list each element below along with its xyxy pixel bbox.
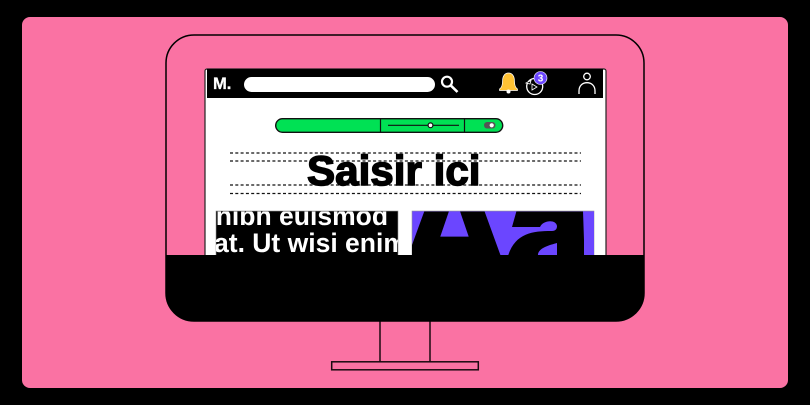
logo: M. (213, 75, 231, 93)
type specimen card: A (395, 136, 514, 320)
type specimen card (412, 210, 594, 255)
text specimen card: at. Ut wisi enim (214, 228, 407, 258)
text specimen card: nibh euismod (216, 201, 388, 231)
icon: magnifier (442, 77, 458, 92)
slider toolbar (276, 119, 503, 132)
icon: replay with badge (526, 72, 547, 94)
icon: user (579, 73, 595, 94)
search field (244, 77, 435, 92)
top navigation bar (207, 69, 603, 98)
dashed guide lines (230, 153, 581, 194)
text specimen card (216, 210, 398, 255)
heading: Saisir ici: Saisir ici (307, 147, 480, 194)
notification badge: 3 (538, 74, 544, 84)
icon: bell (500, 73, 518, 94)
type specimen card: a (498, 140, 594, 330)
monitor body (166, 35, 644, 330)
screen (205, 69, 606, 259)
monitor chin (166, 255, 644, 321)
monitor stand (332, 320, 478, 370)
